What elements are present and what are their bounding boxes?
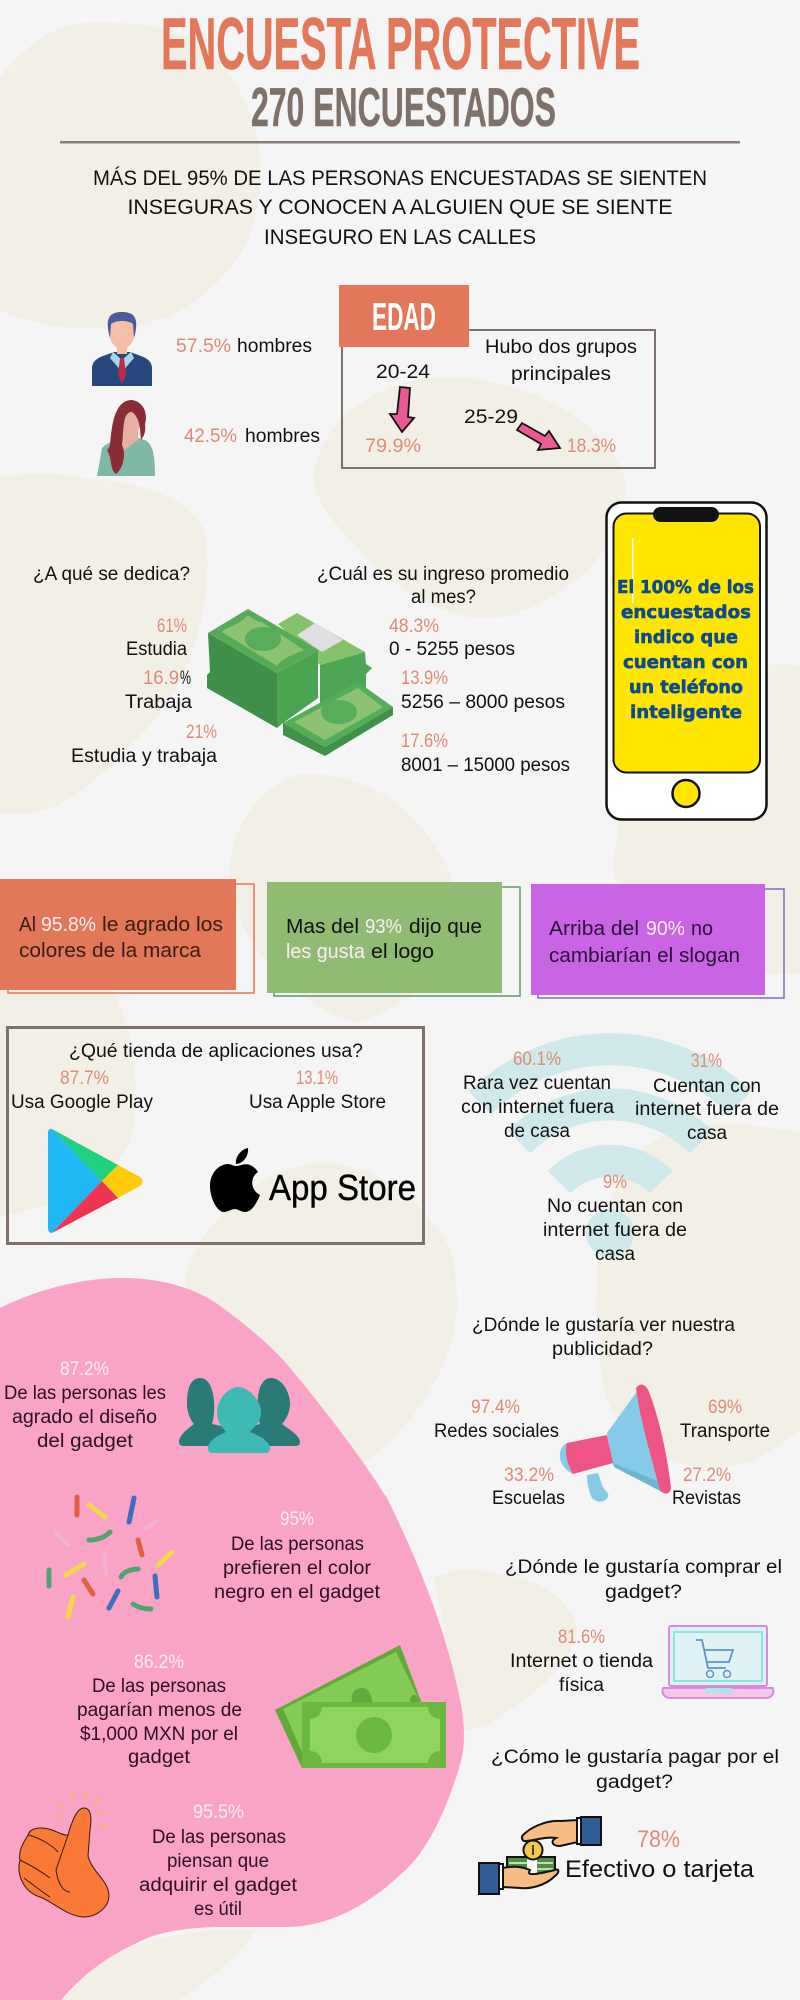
- text: price: 86.2%: [134, 1652, 184, 1673]
- panel: logo card: les gusta: [286, 941, 366, 963]
- text: occupation stats: Trabaja: [125, 692, 192, 713]
- text: occupation heading: ¿A qué se dedica?: [33, 564, 190, 585]
- text: advertising stats: Transporte: [680, 1421, 770, 1442]
- text: advertising question: publicidad?: [552, 1339, 653, 1360]
- text: occupation stats: %: [180, 668, 191, 689]
- text: advertising question: [472, 1315, 735, 1360]
- text: payment question: ¿Cómo le gustaría pagar por el: [491, 1747, 779, 1768]
- text: women share: hombres: [245, 426, 320, 447]
- text: income stats: 17.6%: [401, 731, 448, 752]
- text: black colour: negro en el gadget: [214, 1582, 381, 1603]
- text: gadget design: 87.2%: [60, 1359, 109, 1380]
- text: rarely internet: 60.1%: [513, 1049, 561, 1070]
- text: payment question: [491, 1747, 779, 1793]
- text: occupation stats: [71, 616, 217, 767]
- icon: google play: [48, 1129, 142, 1233]
- text: occupation stats: Estudia: [126, 639, 187, 660]
- text: smartphone statement: cuentan con: [623, 652, 748, 673]
- panel: edad: 18.3%: [567, 436, 616, 457]
- icon: smartphone: [606, 502, 766, 820]
- text: purchase stats: Internet o tienda: [510, 1651, 653, 1672]
- text: app store wordmark: App Store: [269, 1167, 416, 1208]
- text: has internet: casa: [687, 1123, 727, 1144]
- text: occupation stats: 61%: [157, 616, 187, 637]
- text: advertising stats: Escuelas: [492, 1488, 565, 1509]
- icon: apple logo: [210, 1148, 260, 1212]
- panel: colours card: le agrado los: [102, 914, 223, 936]
- text: usefulness: es útil: [194, 1899, 242, 1920]
- subtitle: 270 ENCUESTADOS: [251, 76, 556, 138]
- panel: app stores: Usa Google Play: [11, 1092, 153, 1113]
- icon: woman: [97, 400, 155, 476]
- text: men share: hombres: [237, 336, 312, 357]
- text: gadget design: [4, 1359, 166, 1452]
- text: price: [77, 1652, 242, 1768]
- text: no internet: casa: [595, 1244, 635, 1265]
- text: purchase question: gadget?: [605, 1582, 682, 1603]
- text block: headline statement: MÁS DEL 95% DE LAS PERSONAS ENCUESTADAS SE SIENTEN: [93, 167, 707, 190]
- panel: edad: [339, 285, 655, 468]
- icon: hands and money: [479, 1817, 601, 1894]
- text: income stats: 13.9%: [401, 668, 448, 689]
- panel: app stores: [8, 1028, 424, 1244]
- panel: slogan card: 90%: [646, 918, 685, 940]
- text: smartphone statement: [617, 577, 754, 723]
- text: gadget design: De las personas les: [4, 1383, 166, 1404]
- text: two groups: Hubo dos grupos: [485, 337, 637, 358]
- text: income stats: 48.3%: [389, 616, 439, 637]
- icon: megaphone: [560, 1385, 671, 1502]
- panel: edad: principales: [511, 364, 611, 385]
- text: advertising stats: 33.2%: [504, 1465, 554, 1486]
- text: smartphone statement: indico que: [634, 627, 738, 648]
- text: income heading: al mes?: [411, 587, 476, 608]
- text: income heading: ¿Cuál es su ingreso promedio: [317, 564, 569, 585]
- panel: edad: 79.9%: [365, 436, 421, 457]
- text: usefulness: 95.5%: [193, 1802, 244, 1823]
- panel: slogan card: no: [691, 918, 713, 940]
- text: rarely internet: [461, 1049, 614, 1142]
- text block: headline statement: INSEGURAS Y CONOCEN A ALGUIEN QUE SE SIENTE: [128, 196, 672, 219]
- text: occupation stats: 16.9: [143, 668, 179, 689]
- panel: app stores: ¿Qué tienda de aplicaciones usa?: [69, 1041, 363, 1062]
- text: income stats: 5256 – 8000 pesos: [401, 692, 565, 713]
- icon: wifi: [480, 1049, 740, 1245]
- text: income stats: 0 - 5255 pesos: [389, 639, 515, 660]
- text: occupation stats: Estudia y trabaja: [71, 746, 217, 767]
- text: no internet: 9%: [603, 1172, 627, 1193]
- panel: logo card: 93%: [365, 916, 402, 938]
- panel: colours card: [0, 879, 254, 993]
- text: smartphone statement: El 100% de los: [617, 577, 754, 598]
- text: has internet: internet fuera de: [635, 1099, 779, 1120]
- text: advertising stats: Revistas: [672, 1488, 741, 1509]
- text: gadget design: del gadget: [37, 1431, 134, 1452]
- panel: colours card: 95.8%: [41, 914, 96, 936]
- text: advertising stats: 27.2%: [683, 1465, 731, 1486]
- icon: laptop cart: [663, 1626, 773, 1698]
- text: smartphone statement: encuestados: [621, 602, 751, 623]
- text: has internet: [635, 1051, 779, 1144]
- text: income heading: [317, 564, 569, 608]
- text: usefulness: [139, 1802, 298, 1920]
- text: price: De las personas: [92, 1676, 226, 1697]
- text: advertising question: ¿Dónde le gustaría ver nuestra: [472, 1315, 735, 1336]
- text: men share: [176, 336, 312, 357]
- text: black colour: [214, 1509, 381, 1603]
- text: cash or card: Efectivo o tarjeta: [565, 1856, 755, 1883]
- text: black colour: De las personas: [231, 1534, 364, 1555]
- text: no internet: internet fuera de: [543, 1220, 687, 1241]
- text: no internet: [543, 1172, 687, 1265]
- text: no internet: No cuentan con: [547, 1196, 683, 1217]
- text: rarely internet: de casa: [504, 1121, 570, 1142]
- icon: confetti: [49, 1497, 172, 1617]
- panel: edad: 25-29: [464, 407, 518, 428]
- panel: edad: 20-24: [376, 362, 430, 383]
- panel: logo card: [267, 882, 520, 996]
- text: price: pagarían menos de: [77, 1700, 242, 1721]
- text: women share: [184, 426, 320, 447]
- text: smartphone statement: inteligente: [630, 702, 742, 723]
- icon: banknotes: [275, 1645, 446, 1768]
- text: gadget design: agrado el diseño: [12, 1407, 157, 1428]
- icon: people: [179, 1378, 300, 1453]
- text: advertising stats: 97.4%: [471, 1397, 520, 1418]
- text: rarely internet: con internet fuera: [461, 1097, 614, 1118]
- text: advertising stats: Redes sociales: [434, 1421, 559, 1442]
- panel: logo card: el logo: [371, 941, 434, 963]
- text: purchase stats: física: [559, 1675, 604, 1696]
- text: advertising stats: [434, 1397, 770, 1509]
- panel: colours card: colores de la marca: [19, 940, 202, 962]
- text: 78 percent: 78%: [637, 1826, 680, 1853]
- panel: slogan card: Arriba del: [549, 918, 639, 940]
- text: purchase question: [505, 1557, 782, 1603]
- text: rarely internet: Rara vez cuentan: [463, 1073, 611, 1094]
- panel: pink blob: [0, 1278, 464, 2000]
- text: occupation stats: 21%: [186, 722, 217, 743]
- text block: headline statement: INSEGURO EN LAS CALLES: [264, 226, 536, 249]
- text: usefulness: adquirir el gadget: [139, 1875, 298, 1896]
- panel: logo card: Mas del: [286, 916, 359, 938]
- text: smartphone statement: un teléfono: [629, 677, 743, 698]
- arrow: diagonal: [517, 423, 560, 450]
- icon: thumbs up: [19, 1792, 109, 1917]
- text: payment question: gadget?: [596, 1772, 673, 1793]
- text: purchase question: ¿Dónde le gustaría comprar el: [505, 1557, 782, 1578]
- text: women share: 42.5%: [184, 426, 237, 447]
- text: men share: 57.5%: [176, 336, 231, 357]
- heading: edad: [339, 285, 469, 347]
- panel: slogan card: [531, 884, 784, 998]
- text: usefulness: piensan que: [167, 1851, 269, 1872]
- text: has internet: 31%: [691, 1051, 722, 1072]
- text: purchase stats: [510, 1627, 653, 1696]
- text block: headline statement: [93, 167, 707, 249]
- icon: money stack: [207, 609, 393, 756]
- panel: app stores: 13.1%: [296, 1068, 338, 1089]
- panel: colours card: Al: [19, 914, 36, 936]
- icon: man: [92, 312, 152, 386]
- text: price: gadget: [128, 1747, 191, 1768]
- text: income stats: [389, 616, 570, 776]
- text: black colour: 95%: [280, 1509, 314, 1530]
- panel: edad: EDAD: [372, 296, 436, 339]
- arrow: down: [390, 387, 414, 432]
- panel: logo card: dijo que: [409, 916, 482, 938]
- text: price: $1,000 MXN por el: [80, 1724, 238, 1745]
- text: usefulness: De las personas: [152, 1827, 286, 1848]
- text: advertising stats: 69%: [708, 1397, 742, 1418]
- text: income stats: 8001 – 15000 pesos: [401, 755, 570, 776]
- panel: app stores: Usa Apple Store: [249, 1092, 386, 1113]
- text: purchase stats: 81.6%: [558, 1627, 605, 1648]
- panel: app stores: 87.7%: [60, 1068, 109, 1089]
- text: has internet: Cuentan con: [653, 1076, 761, 1097]
- text: black colour: prefieren el color: [223, 1558, 372, 1579]
- panel: slogan card: cambiarían el slogan: [549, 945, 740, 967]
